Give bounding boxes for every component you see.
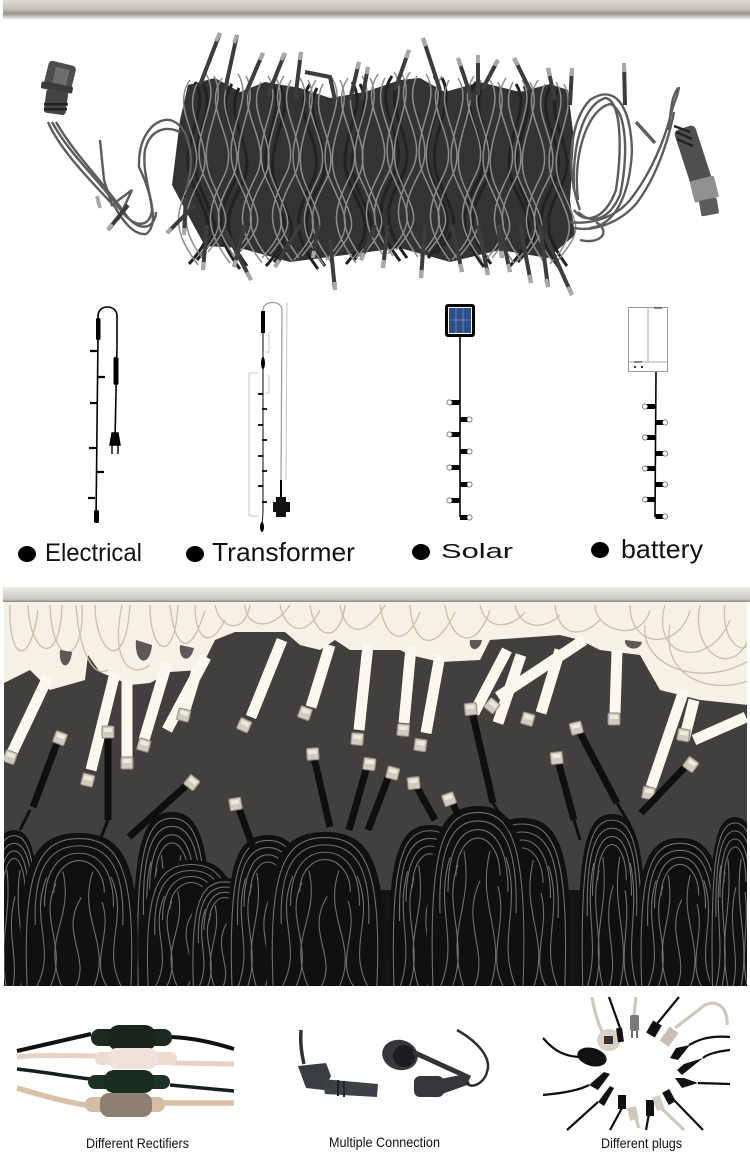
wire strands — [188, 76, 567, 269]
top shadow band — [3, 0, 750, 20]
white wire mass — [4, 600, 750, 705]
photo: different rectifiers — [17, 1025, 234, 1117]
photo: multiple connection — [298, 1030, 488, 1097]
label: Transformer: Transformer — [212, 537, 355, 567]
right waterproof connector — [673, 124, 719, 216]
white lead LEDs — [2, 697, 690, 800]
white LED leads — [12, 640, 746, 787]
diagram: electrical — [88, 307, 120, 523]
caption: Multiple Connection: Multiple Connection — [329, 1134, 440, 1150]
loose loops and leads — [48, 87, 679, 241]
diagram: battery — [628, 307, 668, 519]
diagram: solar — [445, 304, 475, 520]
black LED leads — [20, 707, 689, 850]
wire spikes — [108, 33, 625, 295]
label: Solar — [412, 541, 514, 563]
caption: Different Rectifiers: Different Rectifiers — [86, 1135, 189, 1151]
photo: tangled grey light string — [41, 33, 719, 295]
photo: white and black LED wires — [0, 600, 750, 992]
photo floor — [4, 632, 747, 890]
type labels row — [18, 534, 703, 567]
gaps between white loops — [60, 640, 642, 665]
left waterproof connector — [41, 60, 77, 115]
LED tips — [97, 33, 624, 295]
label: battery: battery — [621, 534, 703, 564]
product thumbnails row — [17, 997, 730, 1151]
black wire coils — [0, 806, 750, 992]
photo: different plugs — [543, 997, 730, 1130]
wiring diagrams row — [88, 302, 668, 532]
label: Solar: Solar — [441, 541, 514, 563]
caption: Different plugs: Different plugs — [601, 1135, 682, 1151]
label: Electrical: Electrical — [45, 539, 142, 567]
diagram: transformer — [249, 302, 290, 532]
black lead LEDs — [52, 702, 699, 811]
second shadow band — [3, 587, 750, 602]
dark mass of coiled wires — [172, 78, 575, 262]
